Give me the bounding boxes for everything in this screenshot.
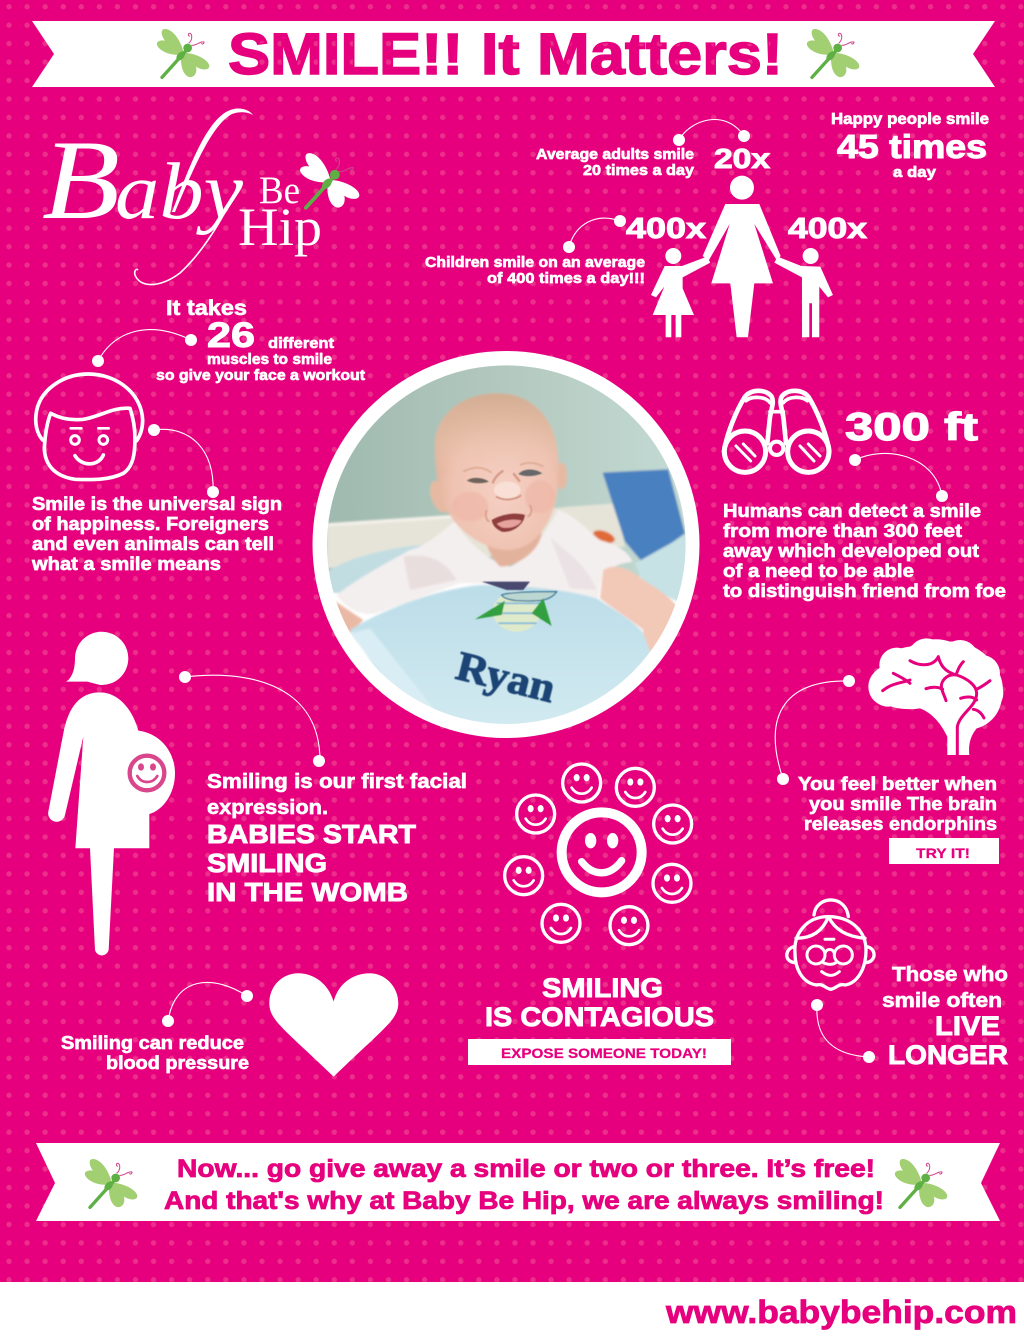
icon: dragonfly bottom right bbox=[895, 1159, 947, 1207]
panel: smile frequency: 400x bbox=[788, 213, 867, 245]
panel: smile frequency: 20 times a day bbox=[583, 162, 695, 179]
bottom banner: Now... go give away a smile or two or three. It’s free! bbox=[177, 1155, 875, 1183]
icon: binoculars bbox=[724, 391, 829, 472]
panel: 26 muscles bbox=[92, 297, 365, 384]
icon: smiley cluster bbox=[505, 764, 692, 945]
icon: heart bbox=[269, 973, 398, 1077]
text block: live longer: Those who bbox=[892, 964, 1008, 986]
text block: universal sign: and even animals can tell bbox=[32, 534, 274, 554]
icon: brain bbox=[868, 638, 1003, 755]
panel: baby photo bbox=[312, 351, 700, 738]
panel: smile frequency: Average adults smile bbox=[536, 146, 694, 163]
text block: blood pressure: Smiling can reduce bbox=[61, 1033, 244, 1053]
bottom banner bbox=[36, 1143, 1000, 1221]
text block: live longer: LONGER bbox=[888, 1040, 1008, 1070]
text block: live longer: LIVE bbox=[935, 1011, 1000, 1041]
text block: 300 ft: to distinguish friend from foe bbox=[723, 581, 1006, 601]
text block: live longer: smile often bbox=[882, 990, 1002, 1012]
text block: smiling is contagious: EXPOSE SOMEONE TODAY! bbox=[501, 1045, 707, 1061]
panel: 26 muscles: 26 bbox=[207, 316, 255, 355]
logo: Baby Be Hip: B bbox=[42, 118, 120, 243]
panel: 26 muscles: different bbox=[268, 335, 334, 352]
text block: endorphins: TRY IT! bbox=[916, 845, 970, 861]
icon: grandmother bbox=[787, 900, 874, 989]
panel: smile frequency: 20x bbox=[714, 143, 771, 174]
panel: smile frequency: 45 times bbox=[837, 128, 987, 165]
text block: smiling is contagious: SMILING bbox=[542, 973, 663, 1003]
panel: smile frequency: a day bbox=[893, 164, 937, 181]
text block: 300 ft: Humans can detect a smile bbox=[723, 501, 981, 521]
text block: 300 ft: from more than 300 feet bbox=[723, 521, 962, 541]
icon: dragonfly right bbox=[807, 29, 859, 77]
icon: logo dragonfly bbox=[300, 153, 359, 208]
text block: 300 ft: away which developed out bbox=[723, 541, 979, 561]
text block: live longer bbox=[811, 964, 1008, 1070]
text block: endorphins: releases endorphins bbox=[804, 814, 997, 834]
text block: smiling is contagious bbox=[468, 973, 731, 1065]
text block: smiling is contagious: IS CONTAGIOUS bbox=[485, 1002, 714, 1032]
panel: smile frequency: 400x bbox=[626, 213, 706, 245]
panel: smile frequency: Happy people smile bbox=[831, 111, 989, 128]
text block: first facial expression: SMILING bbox=[207, 848, 327, 878]
text block: universal sign: what a smile means bbox=[31, 554, 221, 574]
text block: first facial expression: IN THE WOMB bbox=[207, 877, 408, 907]
panel: baby photo: Ryan bbox=[452, 643, 560, 712]
text block: first facial expression bbox=[179, 671, 467, 907]
text block: endorphins: you smile The brain bbox=[809, 794, 997, 814]
website url: www.babybehip.com bbox=[665, 1294, 1017, 1330]
panel: 26 muscles: It takes bbox=[166, 297, 247, 320]
text block: universal sign: Smile is the universal sign bbox=[32, 494, 282, 514]
text block: blood pressure: blood pressure bbox=[106, 1053, 249, 1073]
bottom banner: And that's why at Baby Be Hip, we are always smiling! bbox=[164, 1187, 884, 1215]
text block: first facial expression: BABIES START bbox=[207, 819, 416, 849]
logo: Baby Be Hip bbox=[42, 108, 359, 285]
text block: 300 ft bbox=[723, 406, 1006, 601]
panel: smile frequency: of 400 times a day!!! bbox=[487, 270, 645, 287]
text block: endorphins: You feel better when bbox=[798, 774, 997, 794]
icon: mother and children bbox=[651, 176, 833, 337]
text block: universal sign: of happiness. Foreigners bbox=[32, 514, 269, 534]
title: SMILE!! It Matters! bbox=[228, 22, 783, 87]
panel: 26 muscles: so give your face a workout bbox=[156, 367, 365, 384]
icon: pregnant woman bbox=[48, 632, 175, 955]
logo: Baby Be Hip: Hip bbox=[238, 197, 322, 257]
panel: 26 muscles: muscles to smile bbox=[207, 351, 332, 368]
panel: smile frequency bbox=[425, 111, 989, 287]
text block: first facial expression: expression. bbox=[207, 797, 328, 819]
panel: smile frequency: Children smile on an average bbox=[425, 254, 645, 271]
icon: dragonfly bottom left bbox=[85, 1159, 137, 1207]
text block: blood pressure bbox=[61, 982, 253, 1073]
logo: Baby Be Hip: Be bbox=[259, 169, 300, 212]
text block: universal sign bbox=[31, 424, 282, 574]
icon: dragonfly left bbox=[157, 29, 209, 77]
title banner bbox=[32, 21, 995, 87]
text block: 300 ft: 300 ft bbox=[845, 406, 978, 449]
text block: endorphins bbox=[775, 675, 999, 864]
text block: first facial expression: Smiling is our first facial bbox=[207, 771, 467, 793]
text block: 300 ft: of a need to be able bbox=[723, 561, 914, 581]
footer white strip bbox=[0, 1282, 1024, 1337]
icon: boy face bbox=[36, 374, 143, 480]
logo: Baby Be Hip: aby bbox=[115, 148, 244, 236]
